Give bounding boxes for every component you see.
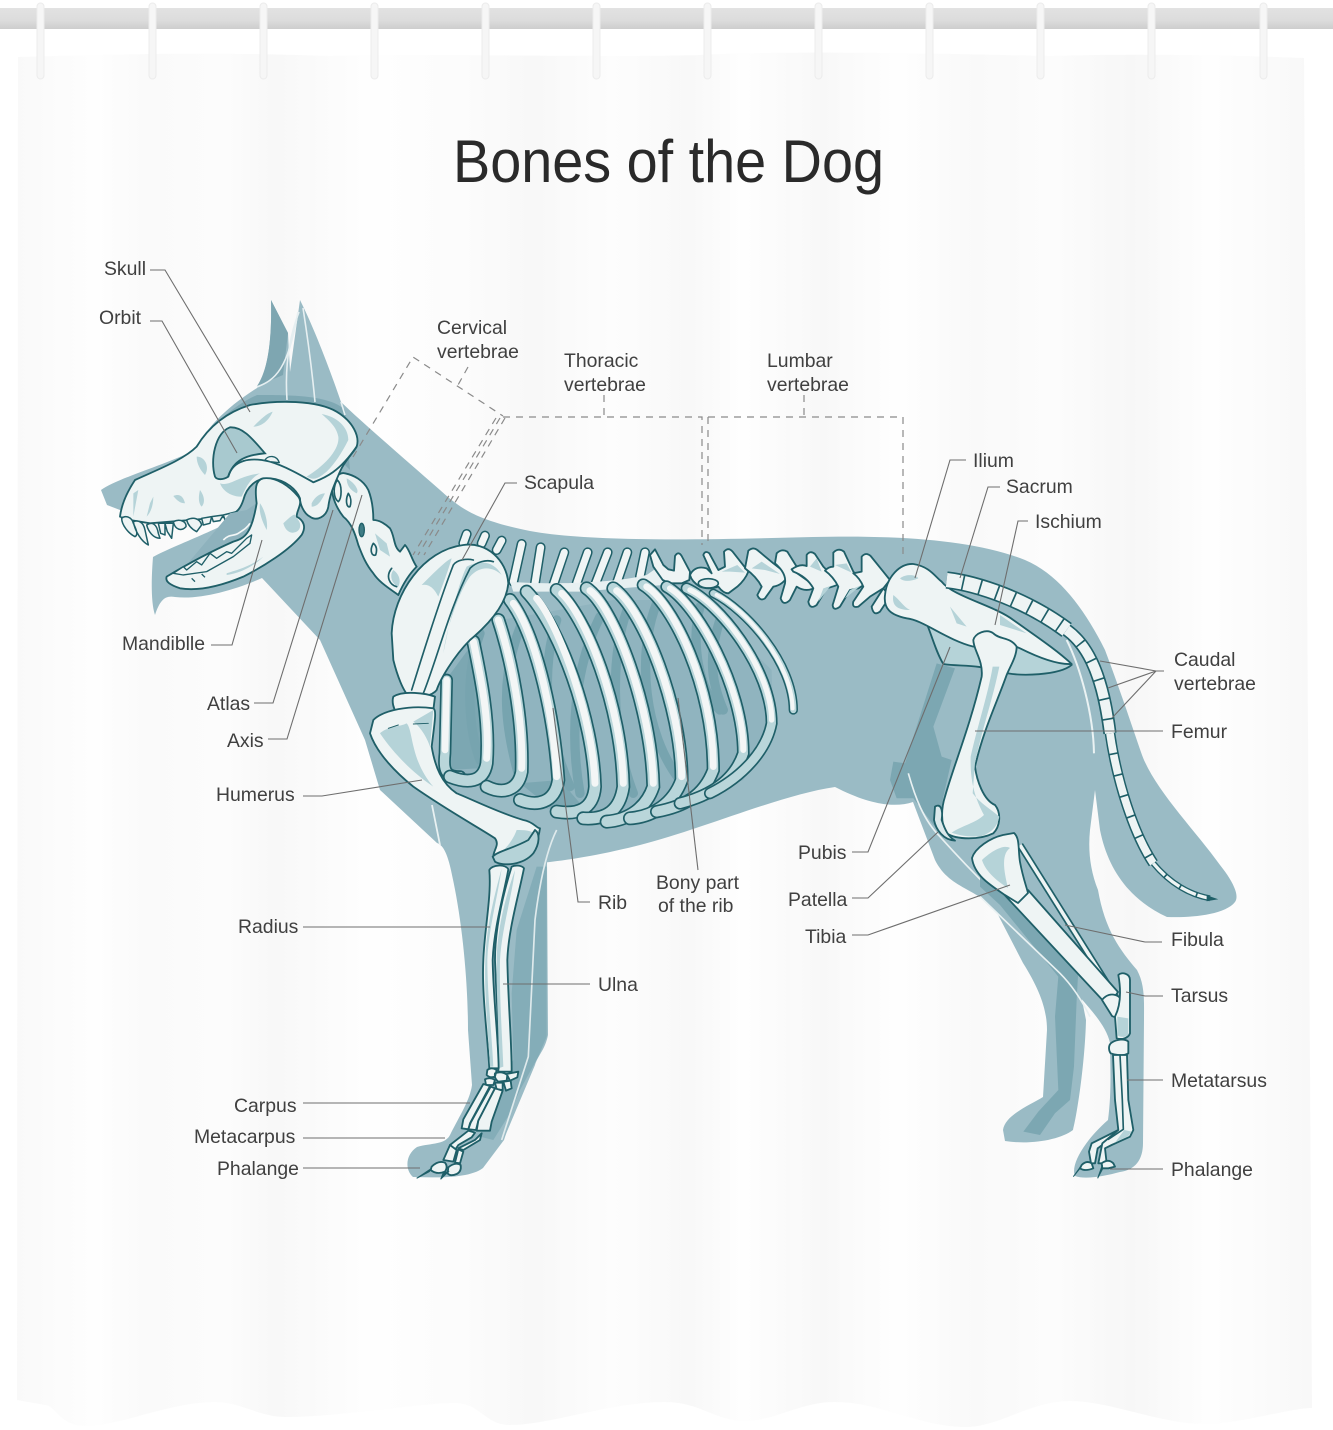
dog silhouette	[101, 300, 1237, 1178]
upper teeth	[122, 512, 237, 545]
tibia shaft	[1000, 890, 1118, 1006]
claws	[1073, 1165, 1102, 1178]
radius	[483, 865, 508, 1068]
elbow cap	[493, 830, 539, 864]
metacarpal bones	[462, 1084, 490, 1129]
lower canine and teeth	[173, 535, 252, 575]
femur	[942, 631, 1017, 838]
toe tips	[1080, 1162, 1093, 1170]
label: lumbar vertebrae: vertebrae	[767, 374, 849, 396]
last thoracic vertebrae	[650, 549, 690, 583]
rib 7	[587, 588, 653, 822]
chest white line	[432, 805, 440, 845]
thoracic cavity shadow	[442, 600, 773, 823]
cranium	[120, 402, 357, 523]
lumbar vertebrae	[650, 548, 890, 613]
scapular shading	[422, 558, 452, 597]
body outline	[101, 300, 1237, 1178]
rib 10	[667, 587, 743, 803]
ulna	[495, 866, 524, 1072]
rib 12	[713, 593, 793, 710]
rib 4	[510, 600, 558, 803]
cervical vertebrae	[332, 473, 417, 595]
distal tibia end	[1102, 995, 1124, 1017]
thoracic vertebra bar	[510, 563, 673, 592]
middle phalanges	[443, 1145, 457, 1162]
front far leg shadow	[480, 830, 557, 1140]
label: caudal vertebrae: Caudal	[1174, 649, 1235, 671]
far front leg	[480, 850, 548, 1141]
rib 1	[444, 680, 460, 777]
metatarsus and hind paw	[1073, 1055, 1133, 1178]
left ear shading	[257, 300, 288, 386]
label: hind phalange: Phalange	[1171, 1159, 1253, 1181]
mouth interior	[177, 503, 257, 577]
lumbar 6	[853, 554, 890, 607]
label: skull: Skull	[104, 258, 146, 280]
fibula	[1020, 845, 1116, 998]
scapula	[392, 545, 508, 698]
lumbar 2	[745, 548, 788, 599]
pelvis shading marks	[893, 575, 1027, 633]
shoulder cap	[393, 693, 435, 713]
label: femur: Femur	[1171, 721, 1228, 743]
carpal bones	[485, 1068, 518, 1091]
label: radius: Radius	[238, 916, 298, 938]
lumbar 1	[690, 549, 748, 593]
label: tibia: Tibia	[805, 926, 847, 948]
label: rib: Rib	[598, 892, 627, 914]
label: cervical vertebrae: vertebrae	[437, 341, 519, 363]
label: ilium: Ilium	[973, 450, 1014, 472]
cervical shading	[347, 478, 400, 587]
label: ulna: Ulna	[598, 974, 638, 996]
rib 9	[643, 585, 713, 812]
skeleton dashed brackets	[353, 357, 903, 555]
inner digit	[1089, 1130, 1118, 1163]
ilium and ischium	[885, 564, 1072, 664]
tarsus	[1109, 973, 1130, 1055]
lumbar 5	[825, 550, 867, 609]
inner white leg line	[908, 773, 1027, 923]
lumbar 3	[775, 550, 817, 603]
humerus	[370, 693, 540, 862]
far hind leg	[980, 880, 1086, 1142]
rib 2	[450, 642, 487, 781]
tail white line	[1067, 640, 1094, 753]
label: ischium: Ischium	[1035, 511, 1102, 533]
rib 8	[613, 588, 682, 818]
femur shading	[952, 667, 999, 836]
rib 3	[487, 620, 522, 791]
label: metacarpus: Metacarpus	[194, 1126, 295, 1148]
label: thoracic vertebrae: vertebrae	[564, 374, 646, 396]
lumbar bracket	[708, 395, 903, 555]
orbit	[213, 427, 265, 479]
cervical bracket	[353, 357, 503, 457]
tongue wavy line	[223, 523, 250, 540]
curtain rod	[0, 8, 1333, 29]
label: fibula: Fibula	[1171, 929, 1224, 951]
labels	[99, 258, 1267, 1181]
label: atlas: Atlas	[207, 693, 250, 715]
jaw shading	[227, 503, 300, 575]
claws	[417, 1168, 448, 1179]
label: thoracic vertebrae: Thoracic	[564, 350, 638, 372]
ear highlights	[257, 308, 345, 415]
label: bony part of the rib: of the rib	[658, 895, 733, 917]
calcaneus	[1115, 973, 1130, 1039]
label: tarsus: Tarsus	[1171, 985, 1228, 1007]
ribcage	[444, 579, 793, 822]
skull shading	[133, 412, 348, 517]
label: caudal vertebrae: vertebrae	[1174, 673, 1256, 695]
thoracic bracket	[503, 395, 702, 545]
label: patella: Patella	[788, 889, 848, 911]
pubis shading	[927, 623, 1072, 675]
forearm bones	[483, 830, 539, 1072]
rib 6	[557, 590, 623, 818]
rib 5	[527, 592, 595, 813]
carpus and front paw	[417, 1068, 518, 1179]
patella	[934, 806, 955, 841]
skull	[120, 402, 357, 545]
metatarsal bones	[1098, 1055, 1133, 1163]
ulna highlight	[497, 870, 515, 1068]
proximal phalanges	[450, 1131, 475, 1150]
label: humerus: Humerus	[216, 784, 295, 806]
thoracic spine	[463, 534, 673, 592]
curtain rings	[37, 3, 1267, 79]
lower hind leg shadow	[980, 873, 1090, 1135]
label: axis: Axis	[227, 730, 264, 752]
scapular spine	[412, 559, 493, 693]
label: metatarsus: Metatarsus	[1171, 1070, 1267, 1092]
lumbar 7	[872, 588, 890, 613]
label: orbit: Orbit	[99, 307, 142, 329]
leader lines	[150, 270, 1164, 1169]
mandible	[166, 478, 304, 589]
tibia shading	[982, 847, 1010, 888]
tibia head	[972, 833, 1028, 903]
label: carpus: Carpus	[234, 1095, 297, 1117]
pelvis	[885, 564, 1072, 675]
label: bony part of the rib: Bony part	[656, 872, 739, 894]
rear hip shadow	[890, 640, 1094, 923]
zygomatic arch	[228, 447, 357, 482]
label: cervical vertebrae: Cervical	[437, 317, 507, 339]
label: mandible: Mandiblle	[122, 633, 205, 655]
label: lumbar vertebrae: Lumbar	[767, 350, 833, 372]
hind lower leg bones	[972, 833, 1124, 1017]
distal phalanges	[431, 1162, 447, 1173]
lumbar 4	[792, 552, 842, 607]
caudal vertebrae tail	[947, 580, 1218, 901]
title: Bones of the Dog	[453, 128, 884, 195]
label: scapula: Scapula	[524, 472, 594, 494]
hock joint	[1109, 1040, 1128, 1055]
rib head joint	[698, 579, 718, 588]
label: sacrum: Sacrum	[1006, 476, 1073, 498]
head dark shading	[195, 395, 350, 470]
label: pubis: Pubis	[798, 842, 847, 864]
thoracic spinous processes	[463, 534, 645, 585]
rib 11	[687, 588, 772, 793]
humerus shading	[380, 710, 537, 862]
jaw bone	[166, 478, 304, 589]
vertebral foramina	[334, 480, 397, 587]
label: front phalange: Phalange	[217, 1158, 299, 1180]
